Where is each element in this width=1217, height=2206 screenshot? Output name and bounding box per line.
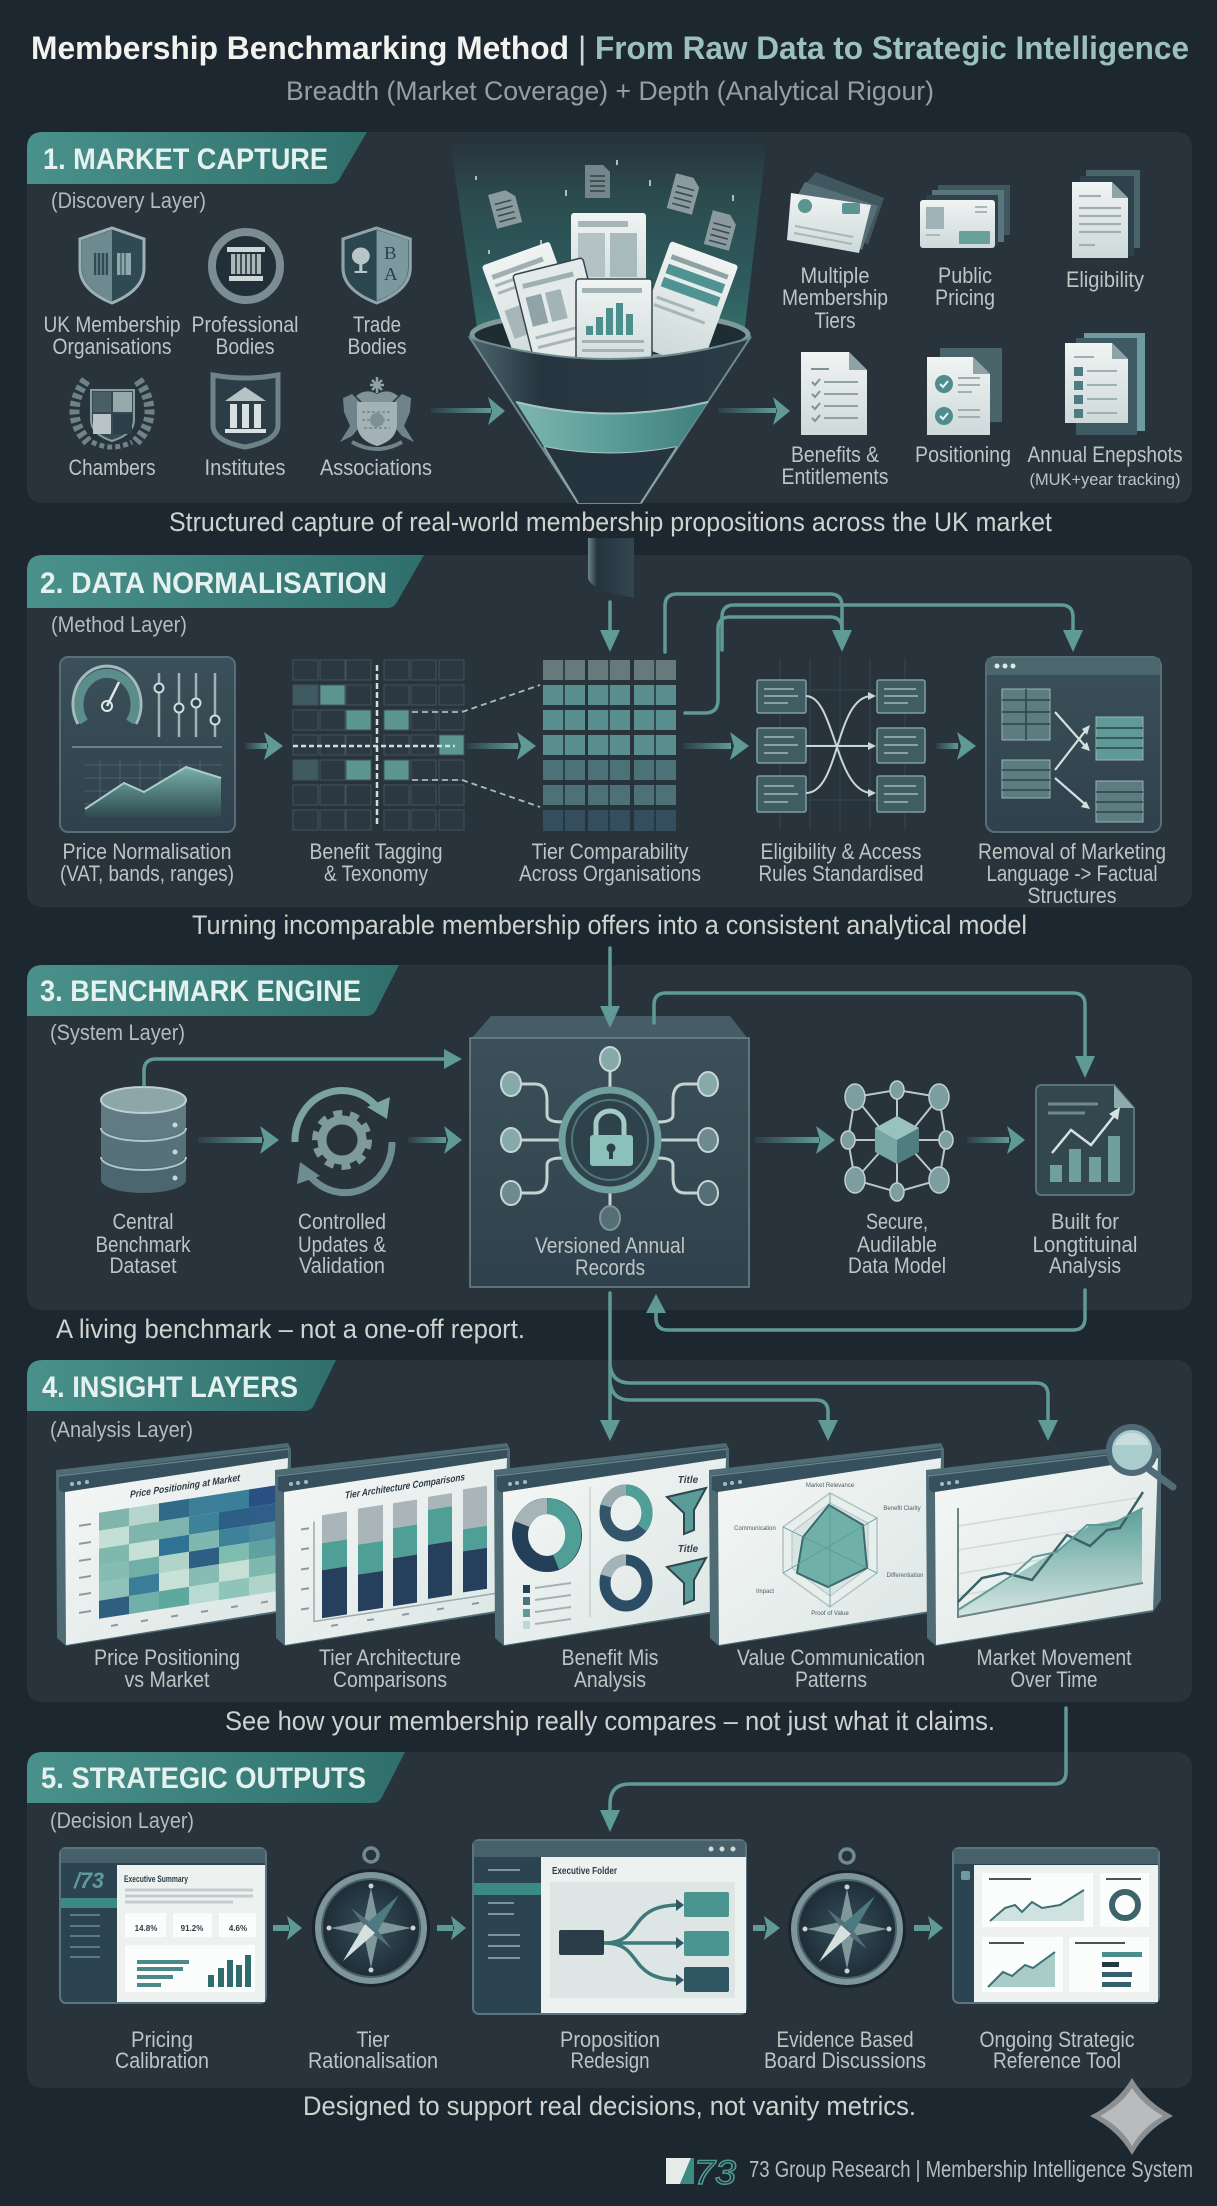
label: UK membership organisations <box>44 312 180 359</box>
icon: eligibility and access mapping <box>757 658 925 830</box>
chart: value communication radar: Proof of Value <box>811 1611 849 1617</box>
label: tier rationalisation: Rationalisation <box>308 2048 438 2073</box>
chart: value communication radar <box>709 1443 944 1646</box>
label: built for longitudinal analysis <box>1032 1209 1138 1278</box>
icon: positioning <box>927 348 1002 435</box>
label: tier architecture <box>319 1645 461 1692</box>
label: chambers: Chambers <box>68 455 156 480</box>
icon: public pricing <box>920 185 1010 248</box>
funnel spout <box>588 538 634 598</box>
label: pricing calibration: Pricing <box>131 2027 193 2052</box>
label: value communication patterns: Value Communication <box>737 1645 925 1670</box>
heading: benchmark engine: 3. BENCHMARK ENGINE <box>40 975 361 1008</box>
label: trade bodies: Bodies <box>348 334 406 359</box>
icon: benefit tagging grid <box>293 660 540 830</box>
label: tier rationalisation: Tier <box>356 2027 390 2052</box>
label: positioning: Positioning <box>915 442 1011 467</box>
dashboard: pricing calibration <box>60 1848 266 2003</box>
funnel cone <box>470 338 750 503</box>
icon: lock and circuit <box>501 1047 718 1230</box>
label: associations: Associations <box>320 455 432 480</box>
label: professional bodies: Professional <box>192 312 298 337</box>
title <box>31 30 1189 66</box>
label: secure data model: Data Model <box>848 1253 946 1278</box>
label: pricing calibration <box>115 2027 209 2073</box>
dashboard: pricing calibration: 4.6% <box>229 1924 247 1933</box>
icon: tier comparability table <box>543 660 676 831</box>
title: | <box>578 30 586 66</box>
footer logo <box>666 2154 736 2192</box>
icon: chambers crest <box>74 380 150 447</box>
label: tier rationalisation <box>308 2027 438 2073</box>
label: market movement: Market Movement <box>976 1645 1132 1670</box>
label: multiple membership tiers <box>782 263 888 333</box>
label: tier architecture: Comparisons <box>333 1667 447 1692</box>
label: controlled updates: Validation <box>299 1253 385 1278</box>
label: eligibility and access <box>758 839 924 886</box>
connector: dataset to engine <box>144 1049 462 1085</box>
label: built for longitudinal analysis: Analysis <box>1049 1253 1121 1278</box>
dashboard: proposition redesign: Executive Folder <box>552 1866 617 1877</box>
arrow <box>936 732 976 760</box>
caption: benchmark engine: A living benchmark – not a one-off report. <box>56 1314 525 1344</box>
heading: strategic outputs <box>27 1752 405 1803</box>
caption: strategic outputs: Designed to support real decisions, not vanity metrics. <box>303 2091 916 2121</box>
feedback loop <box>646 1290 1085 1330</box>
icon: professional bodies ring <box>212 232 280 300</box>
arrow <box>245 732 283 760</box>
label: trade bodies: Trade <box>353 312 401 337</box>
arrow <box>683 732 749 760</box>
heading: insight layers: 4. INSIGHT LAYERS <box>42 1371 298 1404</box>
label: ongoing strategic reference tool <box>980 2027 1134 2073</box>
label: benefits and entitlements <box>782 442 888 489</box>
funnel mini icons: Title <box>678 1475 699 1486</box>
decorative sparkle star <box>1090 2078 1173 2155</box>
heading: strategic outputs: 5. STRATEGIC OUTPUTS <box>41 1762 366 1795</box>
label: UK membership organisations: UK Membership <box>44 312 180 337</box>
panel: 2 data normalisation <box>27 555 1192 908</box>
label: central benchmark dataset: Central <box>112 1209 174 1234</box>
heading: data normalisation: 2. DATA NORMALISATION <box>40 567 387 600</box>
arrow <box>198 1126 279 1154</box>
arrow: into engine <box>600 948 620 1028</box>
label: benefit tagging: & Texonomy <box>324 861 428 886</box>
arrow <box>967 1126 1025 1154</box>
icon: eligibility <box>1072 170 1140 258</box>
icon: trade bodies shield: B <box>384 243 397 263</box>
arrow <box>914 1916 943 1940</box>
label: versioned annual records: Records <box>575 1255 645 1280</box>
heading: market capture: 1. MARKET CAPTURE <box>43 143 328 176</box>
label: tier comparability: Across Organisations <box>519 861 701 886</box>
label: evidence based board discussions <box>764 2027 926 2073</box>
label: value communication patterns <box>737 1645 925 1692</box>
heading: insight layers <box>27 1360 336 1411</box>
label: public pricing: Public <box>938 263 992 288</box>
label: public pricing: Pricing <box>935 285 995 310</box>
icon: institutes shield <box>213 375 278 447</box>
arrow <box>466 732 536 760</box>
heading: market capture <box>27 132 367 184</box>
label: annual snapshots: Annual Enepshots <box>1028 442 1182 467</box>
arrow: sources to funnel <box>431 397 505 425</box>
arrow: funnel to attributes <box>718 397 790 425</box>
chart: price positioning heatmap: Price Positioning at Market <box>130 1473 241 1501</box>
label: tier comparability <box>519 839 701 886</box>
label: multiple membership tiers: Multiple <box>800 263 870 288</box>
icon: controlled updates gear <box>295 1090 392 1193</box>
connector: engine to analysis <box>654 993 1095 1078</box>
panel: 3 benchmark engine <box>27 965 1192 1310</box>
label: public pricing <box>935 263 995 310</box>
funnel mini icons: Title <box>678 1544 699 1555</box>
label: market movement <box>976 1645 1132 1692</box>
icon: UK membership shield <box>80 228 144 303</box>
label: UK membership organisations: Organisations <box>52 334 172 359</box>
label: benefits and entitlements: Benefits & <box>791 442 879 467</box>
heading: benchmark engine <box>27 965 399 1016</box>
arrow <box>408 1126 462 1154</box>
connector: engine to insights <box>600 1293 1058 1441</box>
funnel with documents <box>450 140 767 503</box>
label: removal of marketing language: Language -> Factual <box>986 861 1158 886</box>
floating documents <box>476 160 738 270</box>
funnel rim back <box>472 312 748 358</box>
label: proposition redesign: Proposition <box>560 2027 660 2052</box>
caption: data normalisation: Turning incomparable membership offers into a consistent analytical model <box>192 910 1027 940</box>
label: secure data model <box>848 1209 946 1278</box>
chart: tier architecture stacked bars <box>275 1443 510 1646</box>
chart: value communication radar: Communication <box>734 1526 776 1532</box>
caption: market capture: Structured capture of real-world membership propositions across the UK market <box>169 507 1052 537</box>
layer label: (Discovery Layer) <box>51 188 206 213</box>
documents in funnel <box>482 213 738 382</box>
panel: 4 insight layers <box>27 1360 1192 1702</box>
label: removal of marketing language: Structures <box>1028 883 1116 908</box>
label: evidence based board discussions: Evidence Based <box>776 2027 914 2052</box>
label: benefit mix: Benefit Mis <box>562 1645 658 1670</box>
caption: insight layers: See how your membership really compares – not just what it claims. <box>225 1706 995 1736</box>
label: benefit tagging <box>310 839 442 886</box>
icon: multiple membership tiers cards <box>787 172 884 253</box>
label: professional bodies <box>192 312 298 359</box>
label: multiple membership tiers: Tiers <box>814 308 856 333</box>
funnel mini icons <box>667 1475 706 1604</box>
label: benefit tagging: Benefit Tagging <box>310 839 442 864</box>
label: ongoing strategic reference tool: Ongoing Strategic <box>980 2027 1134 2052</box>
connector: table to eligibility <box>665 594 852 713</box>
label: controlled updates: Controlled <box>298 1209 386 1234</box>
label: annual snapshots <box>1028 442 1182 489</box>
label: benefits and entitlements: Entitlements <box>782 464 888 489</box>
icon: removal of marketing language window <box>986 657 1161 832</box>
arrow <box>437 1916 466 1940</box>
chart: value communication radar: Benefit Clarity <box>883 1506 921 1512</box>
arrow <box>755 1126 835 1154</box>
panel: 1 market capture <box>27 132 1192 503</box>
chart: price positioning heatmap <box>56 1443 291 1646</box>
icon: trade bodies shield: A <box>384 264 398 284</box>
label: eligibility and access: Eligibility & Access <box>760 839 922 864</box>
label: professional bodies: Bodies <box>216 334 274 359</box>
label: controlled updates <box>298 1209 386 1278</box>
label: price positioning: vs Market <box>124 1667 210 1692</box>
label: proposition redesign <box>560 2027 660 2073</box>
dashboard: pricing calibration: Executive Summary <box>124 1874 188 1884</box>
label: institutes: Institutes <box>204 455 286 480</box>
heading: data normalisation <box>27 555 424 608</box>
donut <box>605 1560 647 1606</box>
label: pricing calibration: Calibration <box>115 2048 209 2073</box>
label: market movement: Over Time <box>1010 1667 1098 1692</box>
label: versioned annual records <box>535 1233 685 1280</box>
versioned annual records engine box <box>470 1016 749 1287</box>
label: secure data model: Secure, <box>866 1209 928 1234</box>
label: central benchmark dataset: Dataset <box>110 1253 176 1278</box>
dashboard: pricing calibration: 91.2% <box>181 1924 203 1933</box>
label: benefit mix <box>562 1645 658 1692</box>
icon: price normalisation dashboard <box>60 657 235 832</box>
label: benefit mix: Analysis <box>574 1667 646 1692</box>
label: value communication patterns: Patterns <box>795 1667 867 1692</box>
label: central benchmark dataset: Benchmark <box>96 1232 191 1257</box>
label: proposition redesign: Redesign <box>570 2048 650 2073</box>
label: price normalisation <box>60 839 234 886</box>
label: removal of marketing language <box>978 839 1166 908</box>
arrow <box>273 1916 302 1940</box>
chart: tier architecture stacked bars: Tier Architecture Comparisons <box>345 1472 465 1502</box>
icon: compass evidence based discussions <box>788 1849 906 1988</box>
layer label: (Method Layer) <box>51 612 187 637</box>
label: tier comparability: Tier Comparability <box>532 839 688 864</box>
icon: benefits and entitlements <box>801 352 867 435</box>
layer label: (System Layer) <box>50 1020 185 1045</box>
arrow: funnel to tier table <box>600 602 620 652</box>
subtitle: Breadth (Market Coverage) + Depth (Analytical Rigour) <box>286 76 934 106</box>
connector: table to window <box>722 605 1083 652</box>
label: controlled updates: Updates & <box>298 1232 386 1257</box>
chart: benefit mix donuts <box>494 1443 729 1646</box>
label: built for longitudinal analysis: Built for <box>1051 1209 1119 1234</box>
chart: value communication radar: Market Relevance <box>806 1483 855 1489</box>
label: price positioning: Price Positioning <box>94 1645 240 1670</box>
layer label: (Decision Layer) <box>50 1808 194 1833</box>
label: built for longitudinal analysis: Longtituinal <box>1032 1232 1138 1257</box>
label: secure data model: Audilable <box>857 1232 937 1257</box>
icon: annual snapshots <box>1065 333 1145 435</box>
icon: longitudinal analysis document <box>1036 1085 1134 1195</box>
chart: market movement over time <box>926 1443 1161 1646</box>
dashboard: proposition redesign <box>473 1840 746 2014</box>
dashboard: ongoing reference tool <box>953 1848 1159 2003</box>
title: From Raw Data to Strategic Intelligence <box>595 30 1189 66</box>
icon: associations coat of arms <box>340 377 414 449</box>
label: multiple membership tiers: Membership <box>782 285 888 310</box>
label: ongoing strategic reference tool: Reference Tool <box>993 2048 1121 2073</box>
label: price positioning <box>94 1645 240 1692</box>
label: price normalisation: Price Normalisation <box>62 839 232 864</box>
label: eligibility and access: Rules Standardised <box>758 861 924 886</box>
panel: 5 strategic outputs <box>27 1752 1192 2088</box>
donut <box>520 1506 574 1564</box>
footer logo: 73 <box>694 2154 736 2192</box>
label: trade bodies <box>348 312 406 359</box>
connector: insights to outputs <box>600 1708 1066 1832</box>
label: evidence based board discussions: Board Discussions <box>764 2048 926 2073</box>
label: versioned annual records: Versioned Annual <box>535 1233 685 1258</box>
arrow <box>753 1916 780 1940</box>
dashboard: pricing calibration: /73 <box>73 1868 104 1893</box>
label: annual snapshots: (MUK+year tracking) <box>1030 470 1180 489</box>
donut <box>605 1490 647 1536</box>
dashboard: pricing calibration: 14.8% <box>135 1924 157 1933</box>
label: central benchmark dataset <box>96 1209 191 1278</box>
label: removal of marketing language: Removal of Marketing <box>978 839 1166 864</box>
icon: trade bodies shield <box>343 228 410 303</box>
title: Membership Benchmarking Method <box>31 30 569 66</box>
chart: value communication radar: Differentiation <box>887 1573 923 1579</box>
label: price normalisation: (VAT, bands, ranges) <box>60 861 234 886</box>
label: tier architecture: Tier Architecture <box>319 1645 461 1670</box>
icon: magnifying glass <box>1109 1427 1173 1487</box>
icon: central dataset cylinder <box>101 1087 186 1193</box>
icon: compass tier rationalisation <box>312 1848 430 1987</box>
chart: value communication radar: Impact <box>756 1589 774 1595</box>
layer label: (Analysis Layer) <box>50 1417 193 1442</box>
icon: secure data model network <box>841 1081 953 1201</box>
label: eligibility: Eligibility <box>1066 267 1144 292</box>
